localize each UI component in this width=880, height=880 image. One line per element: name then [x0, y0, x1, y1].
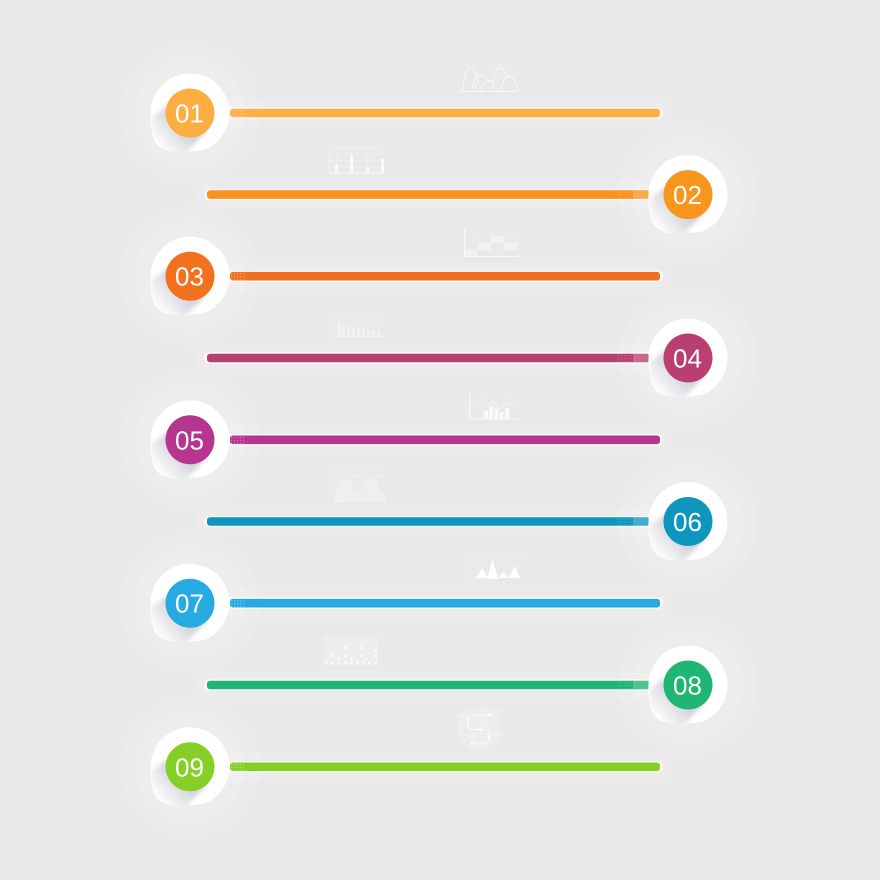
badge disc 09 [150, 727, 229, 809]
badge disc 01 [150, 74, 229, 155]
badge disc 02 [648, 155, 727, 237]
number circle 07 [166, 579, 214, 628]
number circle 01 [166, 88, 214, 138]
icon: timeline roadmap 09 [456, 706, 504, 750]
row 08 [196, 615, 758, 755]
bar 09 [230, 762, 660, 771]
number 07: 07 [175, 589, 204, 619]
bar 06 [207, 517, 650, 526]
bar 03 [230, 272, 660, 280]
number 01: 01 [175, 98, 204, 128]
row 05 [120, 370, 672, 510]
number circle 08 [664, 660, 712, 710]
icon: bars and line 05 [469, 393, 519, 420]
number circle 05 [166, 415, 214, 464]
timeline years: 2013 [456, 713, 467, 719]
timeline years [456, 709, 504, 741]
row 07 [120, 533, 672, 673]
badge disc 07 [150, 564, 229, 645]
number circle 02 [664, 170, 712, 219]
icon: triangle chart 07 [466, 552, 521, 580]
number 09: 09 [175, 752, 204, 782]
badge disc 03 [150, 237, 229, 318]
timeline years: 2011 [478, 722, 489, 728]
number circle 09 [166, 742, 214, 791]
icon: descending bars 04 [333, 314, 384, 337]
bar 05 [230, 436, 660, 444]
badge disc 04 [648, 318, 727, 400]
bar 08 [207, 681, 650, 689]
number circle 06 [664, 497, 712, 546]
infographic canvas [150, 67, 728, 806]
bar 02 [207, 190, 650, 199]
badge disc 05 [150, 400, 229, 482]
row 02 [196, 125, 758, 265]
badge disc 06 [648, 482, 727, 564]
number 05: 05 [175, 425, 204, 455]
icon: step chart 03 [464, 229, 518, 257]
number 06: 06 [673, 507, 702, 537]
number circle 04 [664, 334, 712, 382]
row 01 [120, 43, 672, 183]
icon: dot grid chart 08 [324, 637, 378, 665]
bar 07 [230, 599, 660, 608]
number 03: 03 [175, 262, 204, 292]
number 02: 02 [673, 180, 702, 210]
timeline years: 2015 [492, 709, 503, 715]
row 09 [120, 697, 672, 837]
row 03 [120, 206, 672, 346]
bar 04 [207, 354, 650, 362]
timeline years: 2009 [493, 732, 504, 738]
number 04: 04 [673, 344, 702, 374]
badge disc 08 [648, 646, 727, 727]
timeline years: 2007 [466, 735, 477, 741]
row 06 [196, 452, 758, 592]
bar 01 [230, 109, 660, 117]
icon: hump chart 01 [460, 64, 518, 92]
row 04 [196, 288, 758, 428]
icon: dome chart 06 [332, 470, 385, 503]
number 08: 08 [673, 670, 702, 700]
number circle 03 [166, 252, 214, 301]
icon: bar chart 02 [328, 148, 384, 174]
